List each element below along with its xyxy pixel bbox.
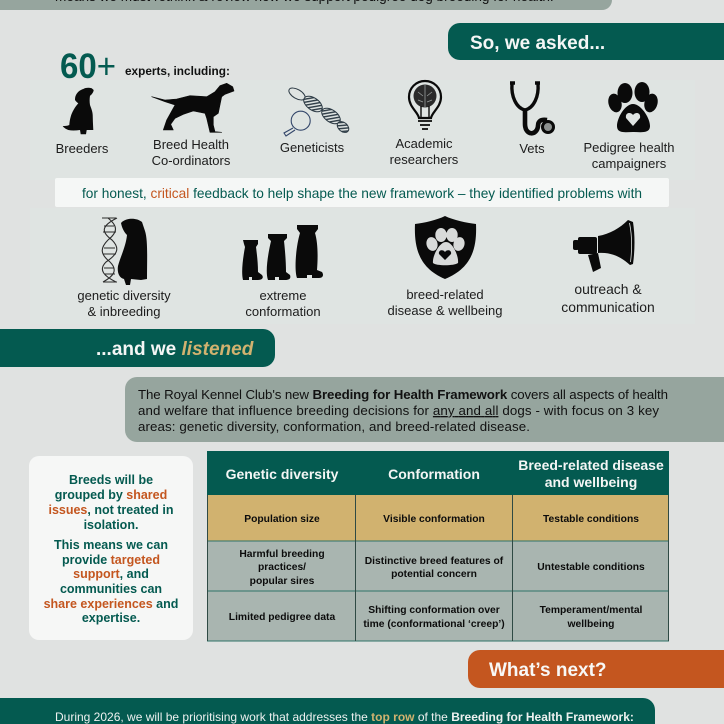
icon: stethoscope	[510, 83, 554, 133]
table middle row: Distinctive breed features of	[365, 556, 504, 567]
label: outreach & communication	[561, 281, 655, 315]
label: genetic diversity & inbreeding	[77, 288, 171, 319]
heading: What's next: What’s next?	[489, 660, 607, 681]
label: Breed Health Co-ordinators	[152, 137, 231, 168]
label: Geneticists: Geneticists	[280, 140, 345, 155]
heading: So, we asked	[448, 23, 724, 60]
side card: grouped breeds: isolation.	[84, 518, 138, 532]
side card: grouped breeds: expertise.	[82, 611, 140, 625]
side card: grouped breeds: share experiences and	[44, 597, 178, 611]
table bottom row: Temperament/mental	[540, 605, 643, 616]
heading: What's next	[468, 650, 724, 688]
table header row: Breed-related disease	[518, 457, 664, 473]
table middle row: potential concern	[391, 569, 477, 580]
table header row: Conformation	[388, 466, 480, 482]
table top row: Visible conformation	[383, 514, 485, 525]
label: Breeders: Breeders	[56, 141, 109, 156]
heading: So, we asked: So, we asked...	[470, 33, 605, 54]
icon: shield with paw	[415, 216, 476, 279]
framework description panel: areas: genetic diversity, conformation, and breed-related disease.	[138, 419, 530, 434]
side card: grouped breeds	[29, 456, 193, 640]
label: outreach & communication: communication	[561, 299, 655, 315]
label: genetic diversity & inbreeding: & inbreeding	[88, 304, 160, 319]
icon: breeder dog	[63, 88, 94, 134]
table bottom row: Shifting conformation over	[368, 605, 500, 616]
side card: grouped breeds: grouped by shared	[55, 488, 167, 502]
icon: megaphone	[573, 220, 634, 272]
feedback banner: for honest, critical feedback to help shape the new framework – they identified problems with	[82, 186, 642, 201]
table middle row	[239, 549, 645, 587]
framework description panel: and welfare that influence breeding decisions for any and all dogs - with focus on 3 key	[138, 403, 659, 418]
table middle row: Untestable conditions	[537, 562, 645, 573]
table middle row: Harmful breeding	[239, 549, 325, 560]
feedback banner	[55, 178, 669, 207]
label: breed-related disease & wellbeing: disease & wellbeing	[388, 303, 502, 318]
table top row	[244, 514, 639, 525]
label: genetic diversity & inbreeding: genetic diversity	[77, 288, 171, 303]
label: Breed Health Co-ordinators: Co-ordinators	[152, 153, 231, 168]
side card: grouped breeds: support, and	[73, 567, 149, 581]
label: Pedigree health campaigners: campaigners	[592, 156, 667, 171]
icon: DNA with dog	[102, 218, 147, 285]
table header row: Genetic diversity	[226, 466, 339, 482]
label: breed-related disease & wellbeing	[388, 287, 502, 318]
label: Academic researchers	[390, 136, 459, 167]
side card: grouped breeds: This means we can	[54, 538, 168, 552]
table bottom row: time (conformational ‘creep’)	[363, 619, 505, 630]
table bottom row: Limited pedigree data	[229, 612, 335, 623]
label: Breed Health Co-ordinators: Breed Health	[153, 137, 229, 152]
icon: DNA and magnifier	[284, 86, 351, 136]
60+ experts heading: 60+	[60, 47, 116, 86]
framework description panel: The Royal Kennel Club's new Breeding for Health Framework covers all aspects of health	[138, 387, 668, 402]
label: Academic researchers: Academic	[395, 136, 453, 151]
framework table	[207, 451, 669, 641]
60+ experts heading	[60, 47, 230, 86]
icon: light bulb with brain	[409, 81, 441, 129]
table header row: and wellbeing	[545, 474, 637, 490]
icon: standing dog	[152, 83, 234, 132]
bottom panel: 2026 priorities	[0, 698, 655, 724]
heading: and we listened	[0, 329, 275, 367]
label: Pedigree health campaigners: Pedigree health	[583, 140, 675, 155]
heading: and we listened: ...and we listened	[96, 339, 254, 360]
table middle row: practices/	[258, 562, 306, 573]
60+ experts heading: experts, including:	[125, 64, 230, 78]
top intro panel	[0, 0, 612, 10]
framework description panel	[125, 377, 724, 442]
side card: grouped breeds: provide targeted	[62, 553, 160, 567]
label: outreach & communication: outreach &	[574, 281, 642, 297]
label: Pedigree health campaigners	[583, 140, 675, 171]
side card: grouped breeds: issues, not treated in	[48, 503, 174, 517]
table bottom row	[229, 605, 643, 630]
label: Academic researchers: researchers	[390, 152, 459, 167]
side card: grouped breeds: communities can	[60, 582, 162, 596]
label: Vets: Vets	[519, 141, 545, 156]
icon: paw with heart	[606, 82, 660, 132]
table middle row: popular sires	[250, 576, 315, 587]
table header row	[226, 457, 664, 490]
label: extreme conformation: extreme	[260, 288, 306, 303]
table top row: Population size	[244, 514, 320, 525]
label: extreme conformation	[245, 288, 321, 319]
table bottom row: wellbeing	[567, 619, 614, 630]
label: breed-related disease & wellbeing: breed-related	[406, 287, 484, 302]
side card: grouped breeds: Breeds will be	[69, 473, 153, 487]
bottom panel: 2026 priorities: During 2026, we will be prioritising work that addresses the top row of the Breeding for Health Framework:	[55, 710, 634, 724]
table top row: Testable conditions	[543, 514, 639, 525]
icon: three dogs of rising size	[242, 225, 323, 280]
label: extreme conformation: conformation	[245, 304, 321, 319]
